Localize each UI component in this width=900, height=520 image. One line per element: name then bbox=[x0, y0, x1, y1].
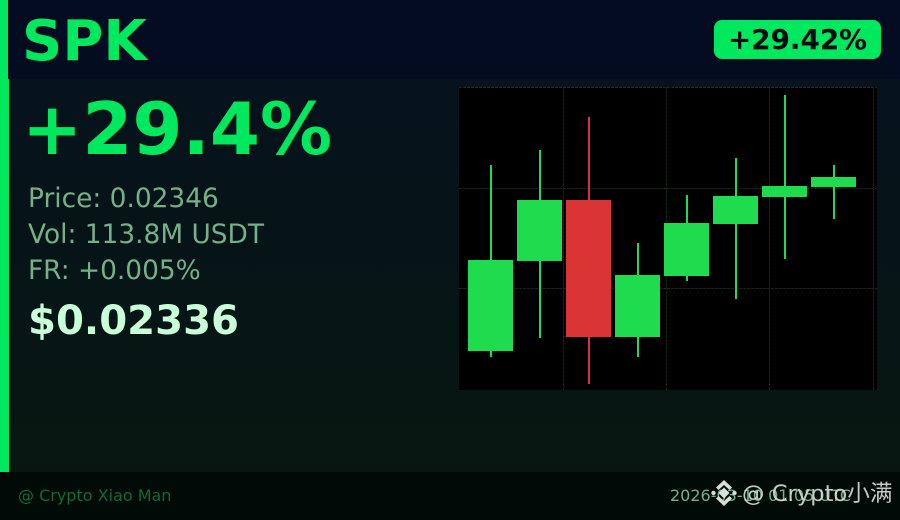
ticker title: SPK bbox=[22, 9, 147, 74]
candle 1 bbox=[468, 165, 513, 357]
change badge: +29.42% bbox=[728, 23, 867, 56]
timestamp: 2026-03-10 01:05 UTC bbox=[670, 486, 851, 505]
large change percentage: +29.4% bbox=[22, 87, 332, 171]
candle 4 bbox=[615, 243, 660, 357]
candlestick chart bbox=[459, 87, 877, 390]
author credit: @ Crypto Xiao Man bbox=[18, 486, 171, 505]
price stat: Price: 0.02346 bbox=[28, 183, 219, 214]
watermark logo bbox=[711, 480, 737, 506]
candle 3 bbox=[566, 117, 611, 384]
candle 2 bbox=[517, 150, 562, 338]
candle 5 bbox=[664, 195, 709, 281]
funding rate stat: FR: +0.005% bbox=[28, 255, 201, 286]
candle 8 bbox=[811, 165, 856, 219]
candle 7 bbox=[762, 95, 807, 259]
watermark text: @ Crypto小满 bbox=[742, 481, 892, 507]
candle 6 bbox=[713, 158, 758, 299]
header bar bbox=[0, 0, 900, 79]
footer bar bbox=[0, 472, 900, 520]
left accent bar bbox=[0, 0, 9, 472]
current price: $0.02336 bbox=[28, 298, 239, 344]
volume stat: Vol: 113.8M USDT bbox=[28, 219, 264, 250]
